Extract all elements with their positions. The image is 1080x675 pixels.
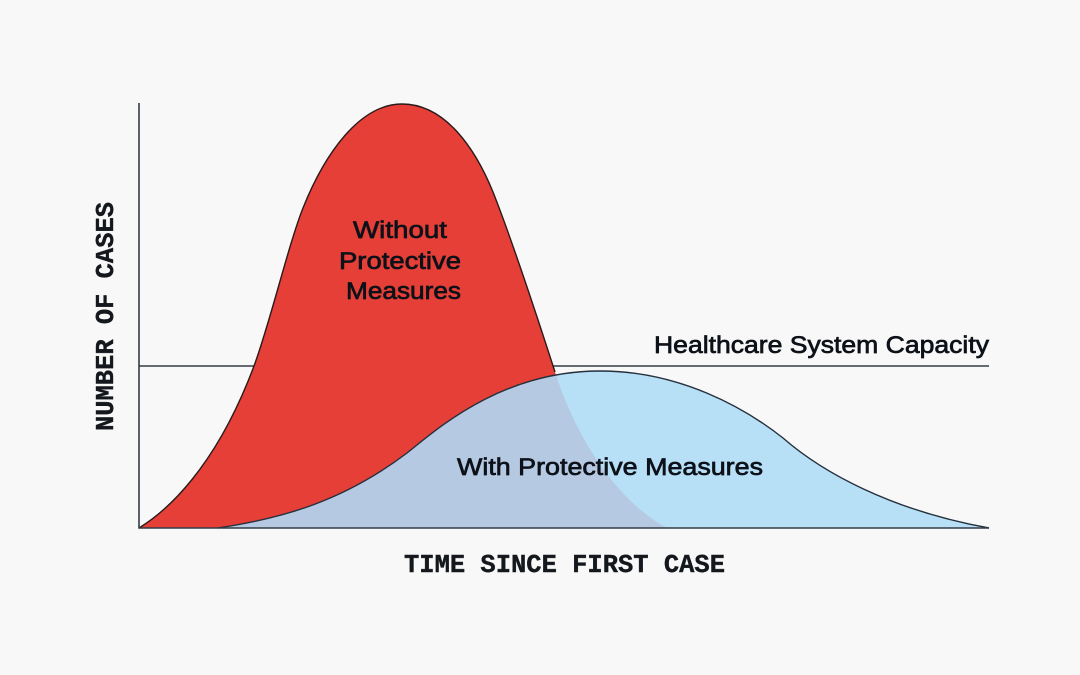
y axis title: NUMBER OF CASES bbox=[91, 202, 121, 431]
label: with protective measures: With Protective Measures bbox=[457, 454, 763, 481]
blue curve outline bbox=[218, 371, 989, 528]
x axis title: TIME SINCE FIRST CASE bbox=[404, 550, 725, 580]
axes bbox=[139, 103, 989, 528]
overlap of the two curves bbox=[228, 376, 666, 528]
label: without protective measures: Measures bbox=[346, 278, 461, 305]
blue curve: with protective measures bbox=[218, 371, 989, 528]
label: without protective measures: Protective bbox=[339, 248, 461, 275]
label: healthcare system capacity: Healthcare System Capacity bbox=[654, 332, 990, 359]
red curve: without protective measures bbox=[139, 104, 667, 528]
healthcare capacity line bbox=[139, 365, 989, 367]
label: without protective measures: Without bbox=[353, 217, 447, 244]
label: without protective measures bbox=[339, 217, 461, 305]
chart: epidemic curves bbox=[139, 104, 989, 528]
red curve outline bbox=[139, 104, 555, 528]
